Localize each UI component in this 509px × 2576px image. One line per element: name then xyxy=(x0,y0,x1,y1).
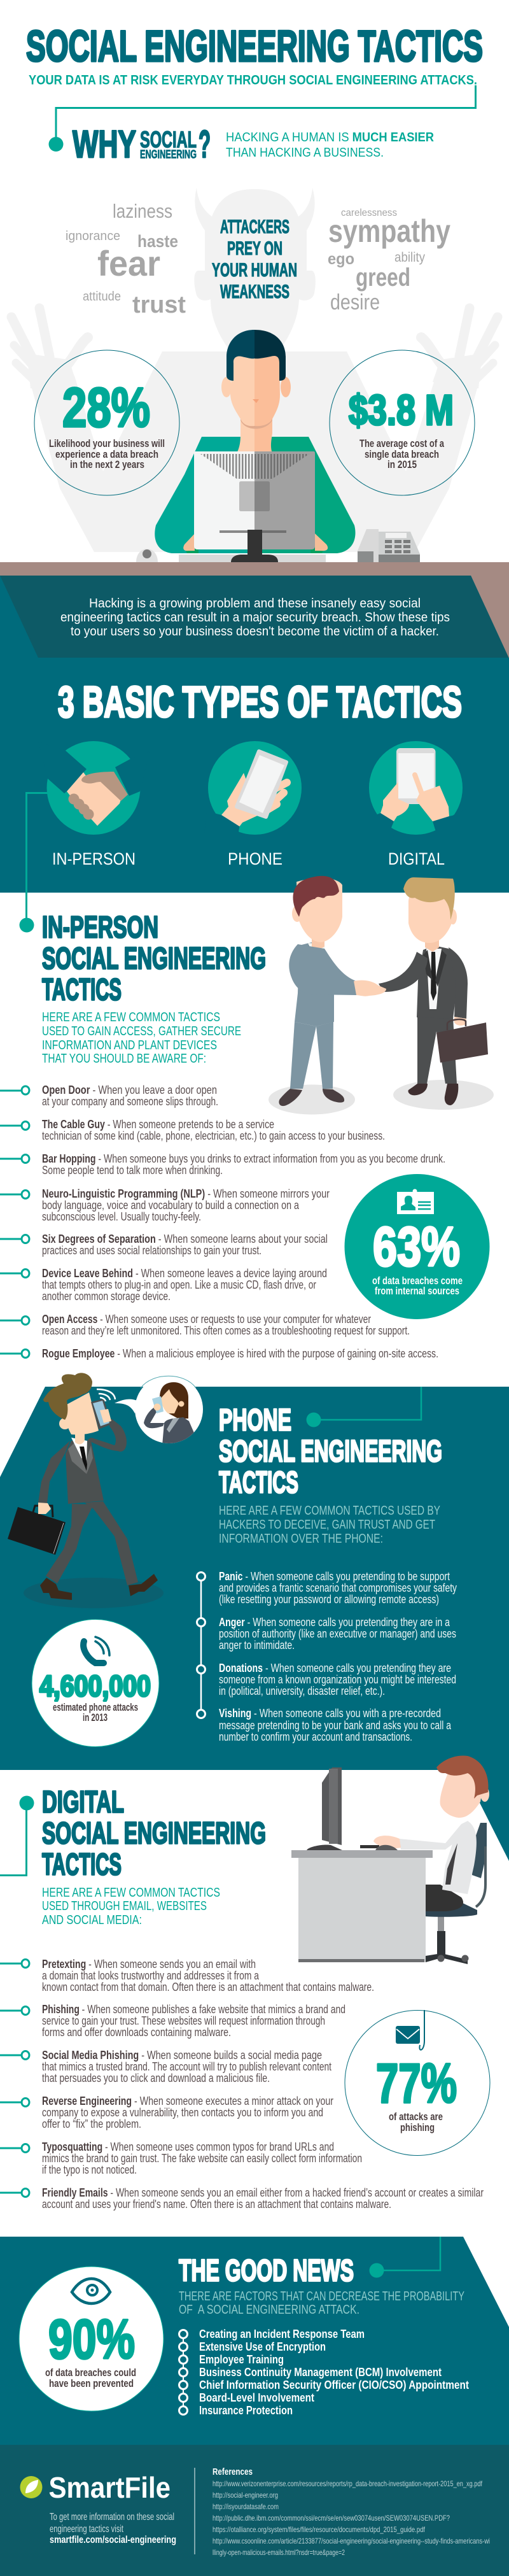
hand on briefcase xyxy=(38,1503,51,1514)
stat circle: 63% xyxy=(345,1174,490,1319)
references: http://social-engineer.org xyxy=(213,2491,278,2500)
sleeves at keyboard xyxy=(183,546,199,553)
stat circle: $3.8 M: single data breach xyxy=(365,448,439,460)
hair xyxy=(227,330,254,381)
text: intro: engineering tactics can result in a major security breach. Show these tips xyxy=(60,611,450,625)
logo: smartfile: SmartFile xyxy=(48,2471,171,2504)
shadow xyxy=(24,1578,164,1608)
right man jacket xyxy=(417,945,459,1019)
connector: subtitle to why xyxy=(48,85,476,152)
phone section background xyxy=(0,1387,509,1770)
item: six degrees: practices and uses social relationships to gain your trust. xyxy=(42,1244,261,1257)
heading: digital social engineering tactics: DIGITAL xyxy=(42,1785,124,1820)
item: nlp xyxy=(0,1187,330,1223)
arm xyxy=(399,1824,461,1850)
item: open access: Open Access - When someone uses or requests to use your computer for whatever xyxy=(42,1313,371,1326)
desk and teal background xyxy=(0,562,509,893)
item: cable guy: The Cable Guy - When someone pretends to be a service xyxy=(42,1118,274,1131)
neck shadow xyxy=(241,417,272,429)
left man jacket xyxy=(295,942,334,1026)
text: digital intro: AND SOCIAL MEDIA: xyxy=(42,1913,142,1927)
text: good news intro xyxy=(179,2289,464,2317)
mouth xyxy=(253,399,259,403)
in-person section background xyxy=(0,893,509,1477)
hair xyxy=(43,1373,92,1420)
factor labels: Board-Level Involvement xyxy=(199,2391,314,2404)
word cloud: human weaknesses: haste xyxy=(137,232,178,251)
item: phishing: Phishing - When someone publishes a fake website that mimics a brand and xyxy=(42,2003,345,2016)
item: six degrees xyxy=(0,1233,328,1257)
item: panic xyxy=(197,1570,457,1606)
right man head xyxy=(425,936,439,952)
label: phone: PHONE xyxy=(228,849,282,868)
stat circle: 4,600,000 xyxy=(32,1620,159,1747)
ports xyxy=(220,530,254,533)
legs xyxy=(46,1504,94,1583)
stat circle: 90% xyxy=(19,2267,164,2411)
word cloud: human weaknesses: ego xyxy=(328,250,354,268)
footer band xyxy=(0,2445,509,2576)
item: open access xyxy=(0,1313,410,1337)
item: open door xyxy=(0,1084,218,1108)
factor labels: Business Continuity Management (BCM) Involvement xyxy=(199,2366,442,2379)
stat circle: 90%: of data breaches could xyxy=(45,2367,136,2379)
desk phone xyxy=(358,529,379,562)
shadows xyxy=(268,1085,355,1114)
references: llingly-open-malicious-emails.html?nsdr=true&page=2 xyxy=(213,2548,345,2557)
illustration: man on phone xyxy=(8,1373,164,1608)
factor labels: Employee Training xyxy=(199,2353,284,2366)
item: cable guy: technician of some kind (cable, phone, electrician, etc.) to gain access to your business. xyxy=(42,1129,385,1142)
stat circle: $3.8 M: $3.8 M xyxy=(349,386,454,434)
references: https://otalliance.org/system/files/files/resource/documents/dpd_2015_guide.pdf xyxy=(213,2525,426,2534)
sweater xyxy=(155,437,254,553)
word cloud: human weaknesses: laziness xyxy=(113,200,172,222)
body and arms xyxy=(31,351,478,552)
stand xyxy=(248,530,262,556)
label: digital: DIGITAL xyxy=(388,849,445,868)
divider xyxy=(194,2468,195,2554)
stat circle: 28%: in the next 2 years xyxy=(70,458,144,471)
text: in-person intro: HERE ARE A FEW COMMON TACTICS xyxy=(42,1010,220,1024)
stat circle: 4,600,000: in 2013 xyxy=(83,1711,108,1723)
jacket xyxy=(66,1441,104,1504)
desk xyxy=(291,1850,433,1858)
text: hacking a human xyxy=(226,131,435,160)
item: cable guy xyxy=(0,1118,385,1142)
item: donations: Donations - When someone calls you pretending they are xyxy=(219,1662,451,1674)
trousers xyxy=(426,1885,463,1911)
item: phishing: service to gain your trust. These websites will request information through xyxy=(42,2014,325,2027)
word cloud: human weaknesses: attitude xyxy=(83,290,121,304)
item: pretexting: Pretexting - When someone sends you an email with xyxy=(42,1958,256,1971)
seat xyxy=(426,1902,477,1917)
monitor xyxy=(194,451,254,549)
word cloud: human weaknesses: greed xyxy=(356,264,410,292)
left man shirt xyxy=(308,943,325,980)
item: phishing xyxy=(0,2003,345,2039)
head xyxy=(59,1418,71,1429)
heading: phone social engineering tactics: TACTICS xyxy=(219,1466,298,1500)
item: reverse engineering: company to expose a vulnerability, then contacts you to inform you and xyxy=(42,2106,323,2119)
icon: phone handset xyxy=(83,1637,109,1663)
text: phone intro xyxy=(219,1504,440,1546)
shirt xyxy=(71,1438,87,1461)
illustration: man at computer xyxy=(136,330,420,562)
heading: in-person social engineering tactics: TACTICS xyxy=(42,973,122,1007)
hands xyxy=(183,534,195,551)
stat circle: 90%: 90% xyxy=(48,2309,135,2370)
factor labels: Extensive Use of Encryption xyxy=(199,2340,326,2353)
digital section corner xyxy=(463,1770,509,1861)
face xyxy=(230,355,254,426)
item: open door: Open Door - When you leave a door open xyxy=(42,1084,217,1096)
briefcase xyxy=(447,1019,466,1030)
item: reverse engineering xyxy=(0,2095,333,2130)
chair xyxy=(472,1823,487,1878)
item: donations: in (political, university, disaster relief, etc.). xyxy=(219,1685,385,1697)
vents xyxy=(200,454,254,479)
heading: why social engineering: ? xyxy=(199,123,211,166)
item: anger: anger to intimidate. xyxy=(219,1639,295,1652)
text: attackers prey on your human weakness: PREY ON xyxy=(227,238,282,259)
briefcase xyxy=(33,1506,53,1517)
icon: hand holding phone xyxy=(204,741,302,840)
item: pretexting: a domain that looks trustworthy and addresses it from a xyxy=(42,1969,260,1982)
text: attackers prey on your human weakness: ATTACKERS xyxy=(220,216,289,237)
panel xyxy=(239,481,254,511)
item: social media phishing: Social Media Phishing - When someone builds a social media page xyxy=(42,2049,322,2062)
text: in-person intro xyxy=(42,1010,241,1066)
stat circle: 90%: have been prevented xyxy=(49,2377,134,2389)
label: in-person: IN-PERSON xyxy=(52,849,136,868)
text: digital intro: USED THROUGH EMAIL, WEBSITES xyxy=(42,1899,207,1913)
factor labels: Chief Information Security Officer (CIO/CSO) Appointment xyxy=(199,2379,469,2391)
arm left xyxy=(38,1441,70,1503)
text: more information: smartfile.com/social-engineering xyxy=(50,2535,176,2545)
item: friendly emails: account and uses your friend's name. Often there is an attachment that contains malware. xyxy=(42,2198,391,2211)
item: typosquatting: mimics the brand to gain trust. The fake website can easily collect form information xyxy=(42,2152,362,2165)
stat circle: $3.8 M: The average cost of a xyxy=(359,437,444,449)
item: vishing: Vishing - When someone calls you with a pre-recorded xyxy=(219,1707,441,1720)
speech bubble: woman on phone xyxy=(115,1375,203,1445)
arm right xyxy=(87,1419,127,1452)
heading: digital social engineering tactics xyxy=(42,1785,266,1882)
item: anger xyxy=(197,1616,456,1652)
icon: envelope on hook xyxy=(396,2010,424,2050)
word cloud: human weaknesses: fear xyxy=(97,243,160,283)
text: hacking a human: HACKING A HUMAN IS MUCH EASIER xyxy=(226,131,435,145)
references: http://isyourdatasafe.com xyxy=(213,2502,279,2511)
item: reverse engineering: Reverse Engineering - When someone executes a minor attack on your xyxy=(42,2095,333,2107)
item: nlp: subconscious level. Usually touchy-feely. xyxy=(42,1210,201,1223)
left man legs xyxy=(290,1022,316,1089)
item: social media phishing xyxy=(0,2049,331,2084)
left man arm xyxy=(289,944,356,995)
devil silhouette xyxy=(11,188,498,552)
word cloud: human weaknesses xyxy=(66,200,450,318)
list: digital tactics xyxy=(0,1958,484,2211)
heading: phone social engineering tactics: PHONE xyxy=(219,1403,291,1438)
right man shoes xyxy=(408,1084,428,1095)
stat circle: 28%: experience a data breach xyxy=(55,448,158,460)
connector: good news xyxy=(369,2237,440,2278)
head and horns xyxy=(194,188,316,347)
item: panic: (like resetting your password or allowing remote access) xyxy=(219,1593,439,1606)
item: social media phishing: that mimics a trusted brand. The account will try to publish relevant content xyxy=(42,2060,331,2073)
item: nlp: Neuro-Linguistic Programming (NLP) - When someone mirrors your xyxy=(42,1187,330,1200)
references: http://public.dhe.ibm.com/common/ssi/ecm/se/en/sew03074usen/SEW03074USEN.PDF? xyxy=(213,2514,450,2523)
heading: digital social engineering tactics: SOCIAL ENGINEERING xyxy=(42,1817,266,1850)
phone xyxy=(91,1399,111,1429)
icon: hands on tablet xyxy=(363,741,468,840)
heading: why social engineering: WHY xyxy=(73,123,136,166)
left hand xyxy=(11,308,88,379)
text: digital intro xyxy=(42,1886,220,1927)
text: in-person intro: USED TO GAIN ACCESS, GATHER SECURE xyxy=(42,1024,241,1038)
icon: handshake xyxy=(38,741,150,835)
text: intro: to your users so your business doesn't become the victim of a hacker. xyxy=(71,625,439,639)
item: vishing xyxy=(197,1707,452,1743)
heading: in-person social engineering tactics: SOCIAL ENGINEERING xyxy=(42,942,266,975)
text: more information xyxy=(50,2512,176,2545)
item: bar hopping: Some people tend to talk more when drinking. xyxy=(42,1164,223,1177)
item: phishing: forms and offer downloads containing malware. xyxy=(42,2026,231,2039)
references: References xyxy=(213,2466,253,2477)
stat circle: 77%: phishing xyxy=(400,2121,435,2134)
stat circle: 4,600,000: 4,600,000 xyxy=(39,1669,151,1702)
stat circle: 63%: of data breaches come xyxy=(372,1275,463,1287)
word cloud: human weaknesses: ability xyxy=(394,250,425,265)
keyboard and mouse xyxy=(360,1845,379,1848)
text: phone intro: INFORMATION OVER THE PHONE: xyxy=(219,1532,383,1546)
word cloud: human weaknesses: sympathy xyxy=(328,213,450,249)
text: phone intro: HACKERS TO DECEIVE, GAIN TRUST AND GET xyxy=(219,1518,435,1532)
stat circle: 28% xyxy=(34,350,179,495)
text: intro: Hacking is a growing problem and these insanely easy social xyxy=(89,597,421,611)
left man head xyxy=(312,933,324,950)
tie xyxy=(445,1843,457,1885)
heading: why social engineering: SOCIAL xyxy=(140,126,197,153)
heading: in-person social engineering tactics xyxy=(42,910,266,1007)
word cloud: human weaknesses: trust xyxy=(132,292,186,318)
factor labels: Creating an Incident Response Team xyxy=(199,2328,365,2340)
item: reverse engineering: offer to “fix” the problem. xyxy=(42,2118,141,2130)
item: donations xyxy=(197,1662,456,1697)
keyboard xyxy=(179,555,326,562)
item: bar hopping xyxy=(0,1152,445,1177)
item: anger: Anger - When someone calls you pretending they are in a xyxy=(219,1616,450,1629)
list: phone tactics xyxy=(197,1570,457,1743)
text: phone intro: HERE ARE A FEW COMMON TACTICS USED BY xyxy=(219,1504,440,1518)
stat circle: 28%: Likelihood your business will xyxy=(49,437,165,449)
heading: in-person social engineering tactics: IN-PERSON xyxy=(42,910,158,945)
text: intro xyxy=(60,597,450,639)
ears xyxy=(221,377,232,397)
factor labels: Insurance Protection xyxy=(199,2404,293,2417)
intro band xyxy=(0,576,509,658)
handshake xyxy=(354,980,386,996)
right man arms xyxy=(379,952,428,992)
head xyxy=(480,1787,489,1802)
stat circle: 28%: 28% xyxy=(62,377,150,439)
item: typosquatting: if the typo is not noticed. xyxy=(42,2163,137,2176)
factor labels xyxy=(199,2328,469,2417)
mouse xyxy=(136,549,158,562)
hand xyxy=(100,1409,111,1423)
stat circle: 4,600,000: estimated phone attacks xyxy=(53,1701,138,1713)
item: six degrees: Six Degrees of Separation - When someone learns about your social xyxy=(42,1233,328,1245)
stat circle: $3.8 M xyxy=(330,350,475,495)
illustration: businessmen shaking hands xyxy=(268,876,494,1114)
text: digital intro: HERE ARE A FEW COMMON TACTICS xyxy=(42,1886,220,1900)
icon: id badge xyxy=(397,1189,434,1214)
left man shoes xyxy=(279,1089,302,1106)
text: attackers prey on your human weakness: WEAKNESS xyxy=(220,281,289,302)
good news section background xyxy=(0,2237,509,2445)
shirt xyxy=(442,1821,477,1894)
connector: phone xyxy=(307,1387,421,1427)
item: device leave behind: Device Leave Behind - When someone leaves a device laying around xyxy=(42,1267,327,1280)
item: nlp: body language, voice and vocabulary to build a connection on a xyxy=(42,1199,300,1212)
monitor xyxy=(322,1767,342,1845)
heading: why social engineering: ENGINEERING xyxy=(140,148,197,160)
ring markers xyxy=(179,2330,187,2414)
signal arcs xyxy=(97,1389,115,1401)
text: in-person intro: THAT YOU SHOULD BE AWARE OF: xyxy=(42,1052,206,1066)
text: attackers prey on your human weakness xyxy=(212,216,297,302)
hands xyxy=(373,1836,401,1848)
word cloud: human weaknesses: desire xyxy=(330,290,380,315)
connector: in-person xyxy=(19,793,48,932)
item: pretexting xyxy=(0,1958,374,1993)
list: good news factors xyxy=(179,2328,469,2417)
stat circle: 63%: from internal sources xyxy=(375,1285,459,1297)
text: attackers prey on your human weakness: YOUR HUMAN xyxy=(212,260,297,281)
stat circle: $3.8 M: in 2015 xyxy=(387,458,417,471)
neck xyxy=(237,407,254,453)
stat circle: 77%: of attacks are xyxy=(389,2111,443,2123)
stat circle: 77% xyxy=(345,2010,490,2156)
item: open door: at your company and someone slips through. xyxy=(42,1095,218,1108)
word cloud: human weaknesses: carelessness xyxy=(341,208,397,218)
right man shirt and tie xyxy=(426,949,442,1009)
shoes xyxy=(40,1578,72,1600)
text: more information: To get more information on these social xyxy=(50,2512,174,2523)
text: good news intro: OF A SOCIAL ENGINEERING ATTACK. xyxy=(179,2303,359,2317)
connector: digital xyxy=(0,1795,34,1876)
right man legs xyxy=(417,1017,457,1084)
item: vishing: number to confirm your account and transactions. xyxy=(219,1730,412,1743)
item: device leave behind: that tempts others to plug-in and open. Like a music CD, flash drive, or xyxy=(42,1278,316,1291)
heading: the good news: THE GOOD NEWS xyxy=(179,2254,354,2288)
stat circle: 77%: 77% xyxy=(376,2053,457,2114)
stat circle: 63%: 63% xyxy=(373,1216,460,1278)
item: panic: Panic - When someone calls you pretending to be support xyxy=(219,1570,450,1583)
text: in-person intro: INFORMATION AND PLANT DEVICES xyxy=(42,1038,217,1052)
heading: digital social engineering tactics: TACTICS xyxy=(42,1848,122,1882)
item: device leave behind: another common storage device. xyxy=(42,1290,171,1303)
heading: phone social engineering tactics xyxy=(219,1403,442,1500)
item: device leave behind xyxy=(0,1267,327,1303)
word cloud: human weaknesses: ignorance xyxy=(66,229,120,243)
item: pretexting: known contact from that domain. Often there is an attachment that contains malware. xyxy=(42,1981,374,1993)
item: typosquatting xyxy=(0,2141,362,2176)
heading: why social engineering xyxy=(73,123,211,166)
list: in-person tactics xyxy=(0,1084,445,1360)
item: friendly emails xyxy=(0,2186,484,2211)
illustration: man at desk xyxy=(291,1755,489,1964)
text: hacking a human: THAN HACKING A BUSINESS. xyxy=(226,146,384,160)
icon: eye xyxy=(72,2279,110,2304)
item: social media phishing: that persuades you to click and download a malicious file. xyxy=(42,2072,270,2084)
item: typosquatting: Typosquatting - When someone uses common typos for brand URLs and xyxy=(42,2141,334,2153)
text: more information: engineering tactics visit xyxy=(50,2524,123,2535)
references xyxy=(213,2466,490,2557)
right hand xyxy=(421,308,498,379)
